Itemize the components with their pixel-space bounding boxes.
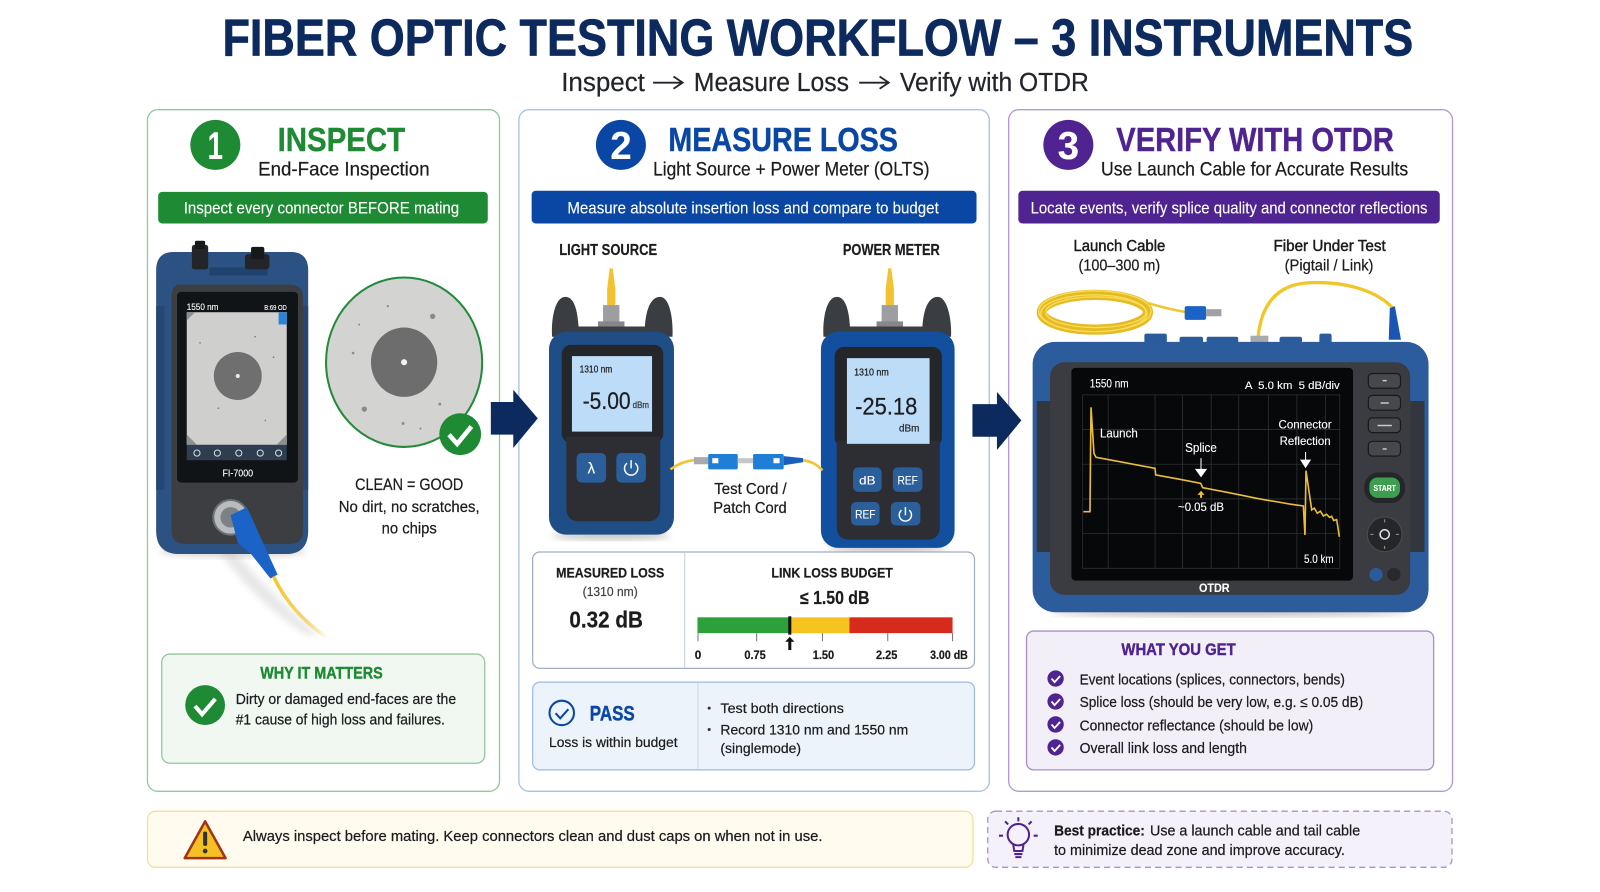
measured loss: [556, 566, 664, 633]
measured loss: (1310 nm): [583, 584, 638, 599]
device: power meter: 1310 nm: [854, 367, 889, 378]
bar chart: loss scale: [695, 616, 968, 662]
notes list: Test both directions: [720, 701, 844, 717]
label: fiber under test: [1273, 238, 1386, 274]
icon: warning triangle: [185, 821, 226, 858]
heading: measure loss: MEASURE LOSS: [668, 122, 898, 159]
navigation dial: [1367, 517, 1402, 552]
device: power meter: -25.18: [855, 393, 917, 420]
label: launch cable: [1073, 238, 1165, 274]
notes list: Record 1310 nm and 1550 nm: [720, 723, 908, 739]
panel: what you get: WHAT YOU GET: [1121, 641, 1236, 659]
step 3 badge: 3: [1058, 125, 1079, 168]
best practice text: Use a launch cable and tail cable: [1150, 824, 1360, 840]
otdr screen readouts: 5.0 km: [1304, 553, 1334, 566]
banner: measure: [532, 191, 977, 223]
panel: what you get: [1027, 631, 1434, 770]
step 3 badge: [1043, 120, 1093, 170]
panel: verify with otdr: [1009, 110, 1453, 791]
checklist: Splice loss (should be very low, e.g. ≤ 0.05 dB): [1080, 695, 1363, 711]
icon: light bulb: [999, 817, 1038, 857]
link loss budget heading: [771, 566, 893, 608]
step 2 badge: 2: [610, 125, 632, 168]
banner: measure: Measure absolute insertion loss and compare to budget: [567, 199, 939, 217]
otdr trace chart: Connector: [1279, 418, 1332, 432]
title: FIBER OPTIC TESTING WORKFLOW – 3 INSTRUMENTS: [222, 10, 1413, 68]
device: light source: -5.00: [583, 388, 631, 415]
label: fiber under test: (Pigtail / Link): [1285, 257, 1373, 274]
step 1 badge: 1: [208, 125, 223, 168]
start button: [1364, 472, 1405, 503]
subheading: end-face inspection: End-Face Inspection: [258, 159, 430, 181]
device: power meter: dBm: [899, 424, 919, 435]
notes list: (singlemode): [720, 741, 801, 757]
otdr trace chart: Reflection: [1280, 434, 1331, 448]
checklist: Overall link loss and length: [1080, 741, 1247, 757]
measured loss: 0.32 dB: [569, 607, 643, 633]
otdr label: OTDR: [1199, 582, 1230, 595]
icon: fiber under test cable: [1258, 283, 1401, 340]
callout: why it matters: [162, 654, 485, 763]
checklist: [1047, 670, 1363, 757]
device: light source: λ: [588, 460, 596, 477]
subtitle flow: Measure Loss: [694, 69, 849, 97]
checklist: Event locations (splices, connectors, bends): [1080, 673, 1345, 689]
step 2 badge: [596, 120, 646, 170]
warning text: Always inspect before mating. Keep connectors clean and dust caps on when not in use.: [243, 829, 822, 845]
banner: inspect: Inspect every connector BEFORE mating: [184, 199, 459, 217]
callout: why it matters: WHY IT MATTERS: [260, 665, 383, 683]
otdr trace chart: Launch: [1100, 426, 1138, 441]
measured loss: MEASURED LOSS: [556, 566, 664, 582]
text: clean = good: CLEAN = GOOD: [355, 476, 463, 494]
label: light source: LIGHT SOURCE: [559, 242, 657, 259]
device: light source: [549, 268, 674, 540]
icon: coiled launch cable: [1039, 291, 1221, 332]
device: power meter: dB: [859, 474, 876, 488]
bar chart: loss scale: 3.00 dB: [930, 649, 968, 662]
callout: warning: [147, 811, 973, 867]
subheading: olts: Light Source + Power Meter (OLTS): [653, 159, 930, 181]
text: clean = good: [339, 476, 480, 538]
device: light source: dBm: [633, 400, 649, 410]
subtitle flow: Verify with OTDR: [900, 69, 1089, 97]
label: fiber under test: Fiber Under Test: [1273, 238, 1386, 255]
banner: inspect: [158, 192, 488, 223]
banner: verify: Locate events, verify splice quality and connector reflections: [1031, 199, 1428, 217]
arrow: inspect to measure: [491, 390, 538, 448]
step 1 badge: [190, 120, 240, 170]
callout: best practice: [988, 811, 1452, 867]
callout: why it matters: Dirty or damaged end-faces are the: [236, 692, 456, 708]
icon: fiber inspection scope device: [156, 241, 329, 639]
bar chart: loss scale: 0: [695, 649, 702, 662]
heading: verify with otdr: VERIFY WITH OTDR: [1116, 122, 1394, 159]
device: otdr: [1033, 334, 1429, 616]
test cord: [670, 454, 822, 470]
text: clean = good: no chips: [382, 521, 437, 538]
otdr screen readouts: 1550 nm: [1090, 378, 1129, 391]
link loss budget heading: LINK LOSS BUDGET: [771, 566, 893, 582]
device: power meter: REF: [855, 507, 876, 521]
banner: verify: [1018, 191, 1440, 223]
device: light source: 1310 nm: [580, 364, 612, 375]
subtitle flow: [561, 69, 1089, 97]
subheading: launch cable: Use Launch Cable for Accurate Results: [1101, 159, 1408, 181]
label: power meter: POWER METER: [843, 242, 940, 259]
bar chart: loss scale: 0.75: [744, 649, 766, 662]
otdr screen readouts: [1090, 378, 1340, 566]
icon: clean end-face: [326, 278, 482, 455]
start button: START: [1373, 483, 1396, 493]
label: test cord: Test Cord /: [714, 481, 787, 498]
icon: pass check: [550, 701, 574, 725]
checklist: Connector reflectance (should be low): [1080, 719, 1313, 735]
label: test cord: [713, 481, 787, 517]
otdr screen readouts: A 5.0 km 5 dB/div: [1245, 380, 1340, 392]
panel: inspect: [147, 110, 500, 791]
label: launch cable: (100–300 m): [1079, 257, 1160, 274]
label: launch cable: Launch Cable: [1073, 238, 1165, 255]
best practice text: to minimize dead zone and improve accuracy.: [1054, 843, 1345, 859]
otdr trace chart: Splice: [1185, 440, 1217, 455]
panel: pass result: [533, 682, 974, 770]
text: within budget: Loss is within budget: [549, 735, 678, 751]
small buttons: [1369, 568, 1400, 581]
otdr trace chart: ~0.05 dB: [1178, 500, 1224, 514]
notes list: [708, 701, 908, 757]
device: power meter: [821, 268, 955, 552]
subtitle flow: Inspect: [561, 69, 645, 97]
icon: fiber inspection scope device: FI-7000: [222, 469, 253, 480]
icon: fiber inspection scope device: B:69 OD: [264, 304, 287, 312]
otdr side buttons: [1368, 373, 1400, 456]
heading: inspect: INSPECT: [278, 122, 405, 159]
best practice text: [1054, 824, 1360, 859]
device: power meter: REF: [897, 474, 918, 488]
icon: fiber inspection scope device: 1550 nm: [187, 302, 219, 312]
panel: measured loss and budget: [533, 552, 974, 668]
arrow: measure to verify: [972, 392, 1021, 450]
callout: why it matters: #1 cause of high loss and failures.: [236, 712, 445, 728]
bar chart: loss scale: 1.50: [813, 649, 835, 662]
bar chart: loss scale: 2.25: [876, 649, 898, 662]
otdr trace chart: [1083, 395, 1340, 568]
best practice text: Best practice:: [1054, 824, 1145, 840]
label: test cord: Patch Cord: [713, 500, 787, 517]
text: pass: PASS: [590, 701, 635, 725]
panel: measure loss: [519, 110, 989, 791]
text: clean = good: No dirt, no scratches,: [339, 499, 480, 516]
link loss budget heading: ≤ 1.50 dB: [800, 587, 869, 608]
